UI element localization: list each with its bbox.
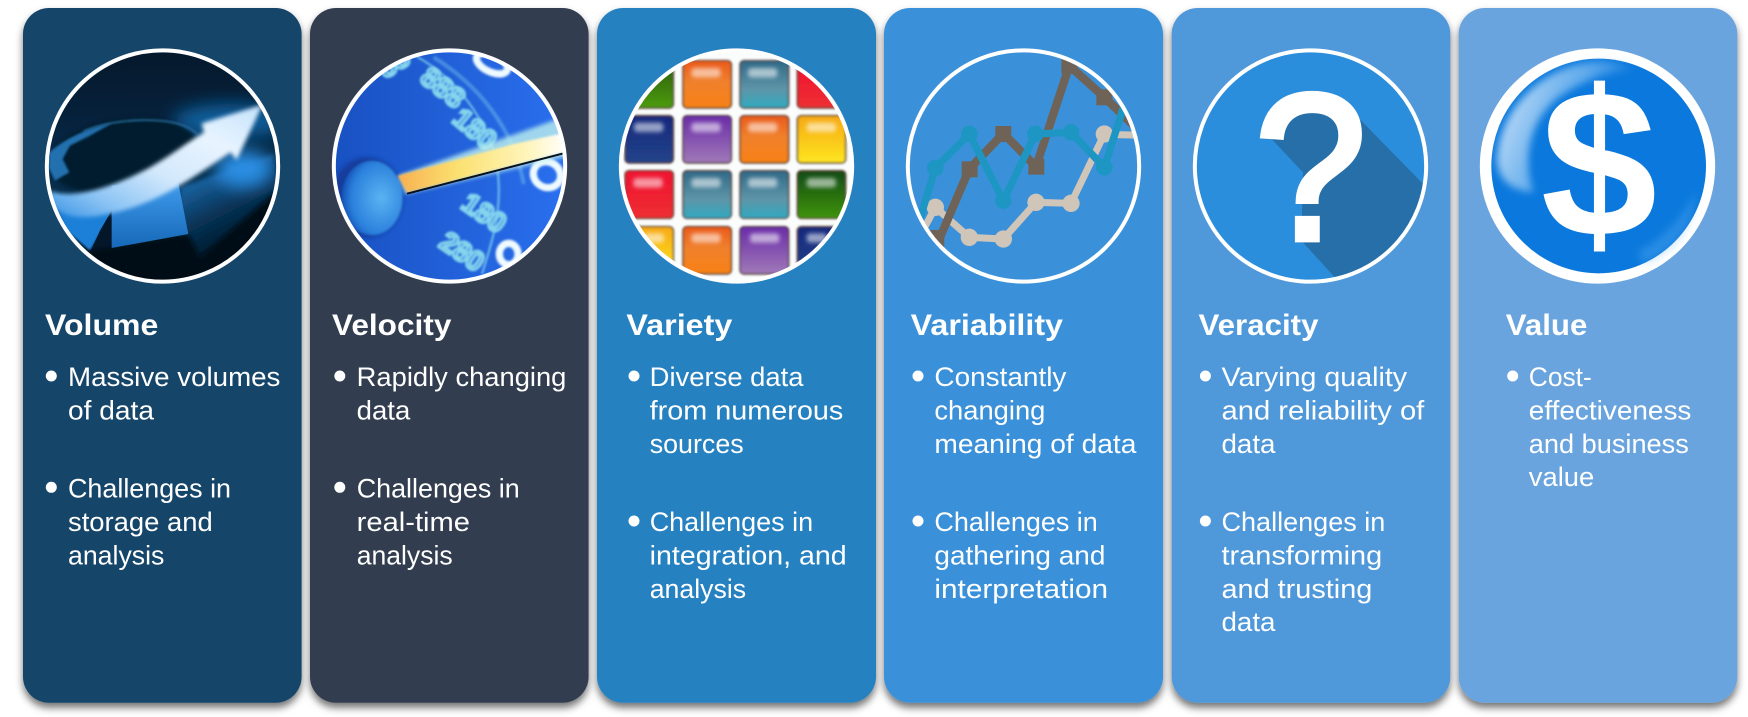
image: speedometer dial: [327, 41, 572, 289]
card background: Veracity: [1172, 8, 1450, 703]
card background: Velocity: [310, 8, 589, 703]
image: speedometer dial: 180: [447, 102, 503, 156]
bullet list: Velocity: Challenges in: [357, 474, 520, 504]
bullet list: Veracity: transforming: [1222, 540, 1382, 570]
panel: Variability: [884, 8, 1163, 703]
panel: Volume: [23, 8, 302, 703]
image: speedometer dial: 280: [434, 226, 490, 278]
bullet list: Variability: gathering and: [934, 540, 1105, 570]
bullet list: Velocity: data: [357, 395, 411, 425]
image: fluctuating line chart: [908, 50, 1146, 282]
bullet list: Variability: interpretation: [934, 574, 1108, 604]
card background: Value: [1459, 8, 1737, 703]
panel: Velocity: [310, 8, 589, 703]
card background: Variability: [884, 8, 1163, 703]
bullet list: Veracity: and reliability of: [1222, 395, 1425, 425]
bullet list: Velocity: [334, 362, 566, 570]
bullet list: Veracity: [1200, 362, 1425, 637]
heading: Volume: Volume: [45, 309, 158, 342]
bullet list: Veracity: data: [1222, 429, 1276, 459]
bullet list: Variability: Constantly: [934, 362, 1067, 392]
image: speedometer dial: 180: [456, 187, 512, 239]
bullet list: Value: effectiveness: [1529, 395, 1691, 425]
icon: question mark with long shadow: ?: [1255, 51, 1366, 284]
bullet list: Velocity: Rapidly changing: [357, 362, 566, 392]
heading: Veracity: Veracity: [1198, 309, 1319, 342]
bullet list: Variety: from numerous: [650, 395, 843, 425]
bullet list: Variety: Diverse data: [650, 362, 804, 392]
heading: Variability: Variability: [911, 309, 1063, 342]
card background: Variety: [597, 8, 876, 703]
image: data globe with rising arrow: [40, 44, 287, 289]
icon: question mark with long shadow: [1188, 44, 1433, 289]
panel: Veracity: [1172, 8, 1450, 703]
bullet list: Veracity: data: [1222, 607, 1276, 637]
bullet list: Variability: meaning of data: [934, 429, 1137, 459]
icon: glossy dollar coin: [1480, 47, 1715, 284]
heading: Value: Value: [1506, 309, 1587, 342]
bullet list: Veracity: Varying quality: [1222, 362, 1408, 392]
heading: Variety: Variety: [626, 309, 733, 342]
bullet list: Volume: [46, 362, 280, 570]
bullet list: Variability: Challenges in: [934, 507, 1098, 537]
bullet list: Variability: [912, 362, 1137, 604]
bullet list: Variability: changing: [934, 395, 1045, 425]
bullet list: Veracity: Challenges in: [1222, 507, 1385, 537]
bullet list: Volume: Challenges in: [68, 474, 231, 504]
card background: Volume: [23, 8, 302, 703]
bullet list: Variety: [628, 362, 847, 604]
bullet list: Velocity: real-time: [357, 507, 470, 537]
bullet list: Veracity: and trusting: [1222, 574, 1372, 604]
image: grid of coloured tiles: [614, 44, 859, 289]
bullet list: Velocity: analysis: [357, 540, 453, 570]
bullet list: Value: value: [1529, 462, 1594, 492]
icon: glossy dollar coin: $: [1541, 47, 1657, 281]
bullet list: Volume: of data: [68, 395, 155, 425]
bullet list: Value: and business: [1529, 429, 1689, 459]
bullet list: Volume: Massive volumes: [68, 362, 280, 392]
bullet list: Variety: sources: [650, 429, 744, 459]
bullet list: Variety: Challenges in: [650, 507, 813, 537]
bullet list: Value: Cost-: [1529, 362, 1592, 392]
heading: Velocity: Velocity: [332, 309, 452, 342]
bullet list: Volume: storage and: [68, 507, 213, 537]
bullet list: Value: [1507, 362, 1691, 492]
panel: Value: [1459, 8, 1737, 703]
bullet list: Variety: integration, and: [650, 540, 847, 570]
bullet list: Volume: analysis: [68, 540, 164, 570]
bullet list: Variety: analysis: [650, 574, 746, 604]
image: speedometer dial: 888: [415, 61, 471, 114]
panel: Variety: [597, 8, 876, 703]
image: speedometer dial: 88: [372, 41, 415, 84]
